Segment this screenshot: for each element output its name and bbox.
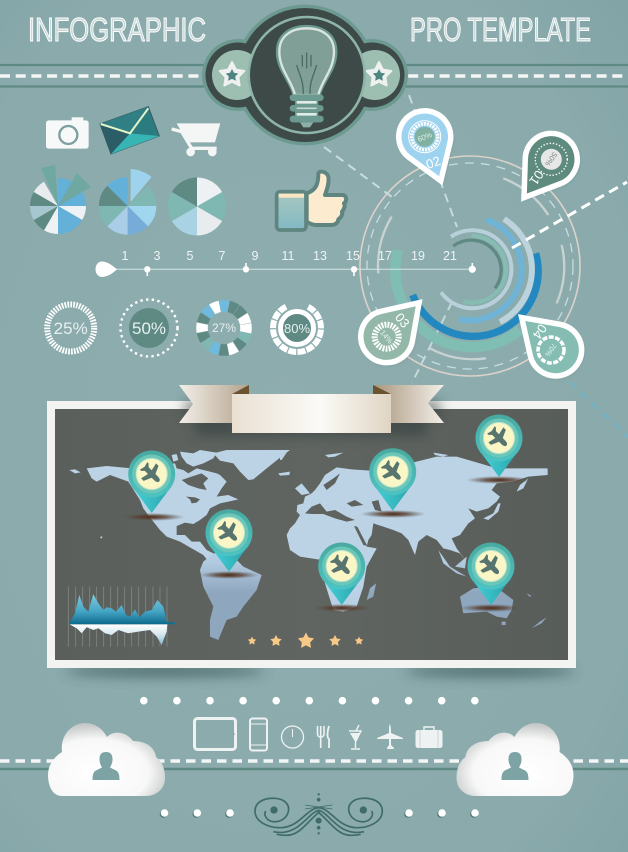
- icon: suitcase: [416, 727, 442, 748]
- panel shadows: [65, 665, 575, 677]
- icon: tablet: [194, 718, 236, 750]
- gauge 80%: 80%: [284, 321, 310, 336]
- timeline: 17: [378, 249, 392, 263]
- New Zealand: [532, 617, 547, 628]
- pin 03: [350, 285, 439, 376]
- ribbon shadows: [185, 401, 440, 436]
- title left: INFOGRAPHIC: [28, 11, 206, 48]
- gauge 80%: [265, 296, 329, 360]
- dots row bottom: [160, 809, 479, 818]
- cloud right with user: [456, 723, 574, 796]
- South America: [200, 553, 262, 640]
- Greenland: [213, 450, 290, 480]
- Arctic archipelago: [180, 450, 217, 467]
- Madagascar: [367, 583, 376, 600]
- radial diagram: rings and arcs: [324, 95, 628, 437]
- world map continents: [69, 450, 548, 640]
- timeline: [96, 249, 476, 277]
- Sumatra and Java: [438, 550, 467, 577]
- gauge 27%: [193, 297, 255, 359]
- pin 02: 60%: [416, 130, 434, 144]
- gauge 25%: 25%: [54, 319, 88, 338]
- Tasmania: [502, 622, 506, 625]
- UK: [295, 483, 310, 495]
- icon: envelope: [100, 107, 159, 154]
- icon: shopping cart: [172, 123, 220, 156]
- pin 03: 03: [392, 310, 413, 331]
- gauge 50%: 50%: [132, 319, 166, 338]
- area chart: [68, 587, 175, 647]
- icon: cocktail glass: [349, 725, 361, 749]
- map pin: Africa: [318, 542, 365, 605]
- map pin: Asia: [369, 448, 416, 511]
- Australia: [460, 587, 513, 618]
- icon: phone: [250, 718, 267, 750]
- Novaya Zemlya: [433, 453, 448, 457]
- Aleutian fragment: [69, 469, 81, 473]
- timeline: 11: [282, 249, 295, 263]
- gauge 27%: 27%: [212, 321, 236, 335]
- map pin: Australia: [468, 542, 514, 605]
- pin 01: 50%: [543, 150, 559, 168]
- North America: [87, 463, 238, 563]
- Kamchatka: [527, 593, 532, 597]
- timeline: 9: [252, 249, 259, 263]
- gauge 25%: [47, 304, 94, 352]
- Japan: [483, 503, 501, 520]
- pin 04: 70%: [543, 342, 557, 357]
- dots row top: [140, 697, 479, 704]
- icon: fork and knife: [318, 726, 329, 748]
- icon: thumbs up: [277, 172, 346, 230]
- timeline: 19: [411, 249, 425, 263]
- top band with dashed line: [0, 65, 628, 86]
- Baffin fragment: [172, 454, 178, 462]
- ornament flourish: [255, 793, 382, 835]
- map pin: North America: [128, 450, 175, 513]
- timeline: 7: [219, 249, 226, 263]
- panel: world map: [47, 401, 576, 668]
- icon: left star: [212, 50, 262, 100]
- map water cutouts: [182, 473, 387, 546]
- timeline: 21: [443, 249, 457, 263]
- icon: clock: [282, 726, 304, 748]
- map pin shadows: [119, 476, 532, 612]
- pin 02: 02: [424, 153, 443, 172]
- timeline: 3: [154, 249, 161, 263]
- pin 04: 04: [529, 321, 550, 342]
- map pin: South America: [206, 509, 252, 572]
- Sakhalin: [517, 478, 528, 492]
- icon: user: [502, 752, 528, 780]
- Afro-Eurasia: [287, 457, 548, 612]
- icon: airplane: [377, 724, 403, 749]
- timeline: 15: [346, 249, 360, 263]
- bottom band with dashed line: [0, 761, 628, 769]
- cloud left with user: [48, 723, 165, 796]
- emblem with light bulb: [202, 4, 408, 146]
- pin 04: [504, 299, 594, 389]
- banner ribbon: [179, 385, 444, 433]
- icon: light bulb: [278, 27, 335, 127]
- gauge 50%: [120, 300, 178, 356]
- Hawaii dot: [100, 536, 102, 538]
- icon: camera: [46, 117, 89, 149]
- pin 01: 01: [526, 167, 547, 188]
- Iceland: [278, 472, 290, 476]
- map pin: Russia: [476, 414, 522, 477]
- timeline: 5: [187, 249, 194, 263]
- pin 02: [391, 103, 467, 192]
- pin 03: 14%: [378, 328, 395, 346]
- pie chart 3: [168, 178, 226, 236]
- timeline: 1: [122, 249, 129, 263]
- rating stars: [248, 632, 363, 648]
- Iceland east: [280, 450, 288, 460]
- pin 01: [503, 123, 589, 214]
- pie chart 1: [30, 165, 91, 234]
- pie chart 2: [99, 169, 156, 235]
- timeline: 13: [313, 249, 327, 263]
- icon: user: [92, 752, 120, 780]
- Borneo: [455, 557, 467, 568]
- Svalbard: [325, 453, 343, 457]
- icon: right star: [350, 50, 400, 100]
